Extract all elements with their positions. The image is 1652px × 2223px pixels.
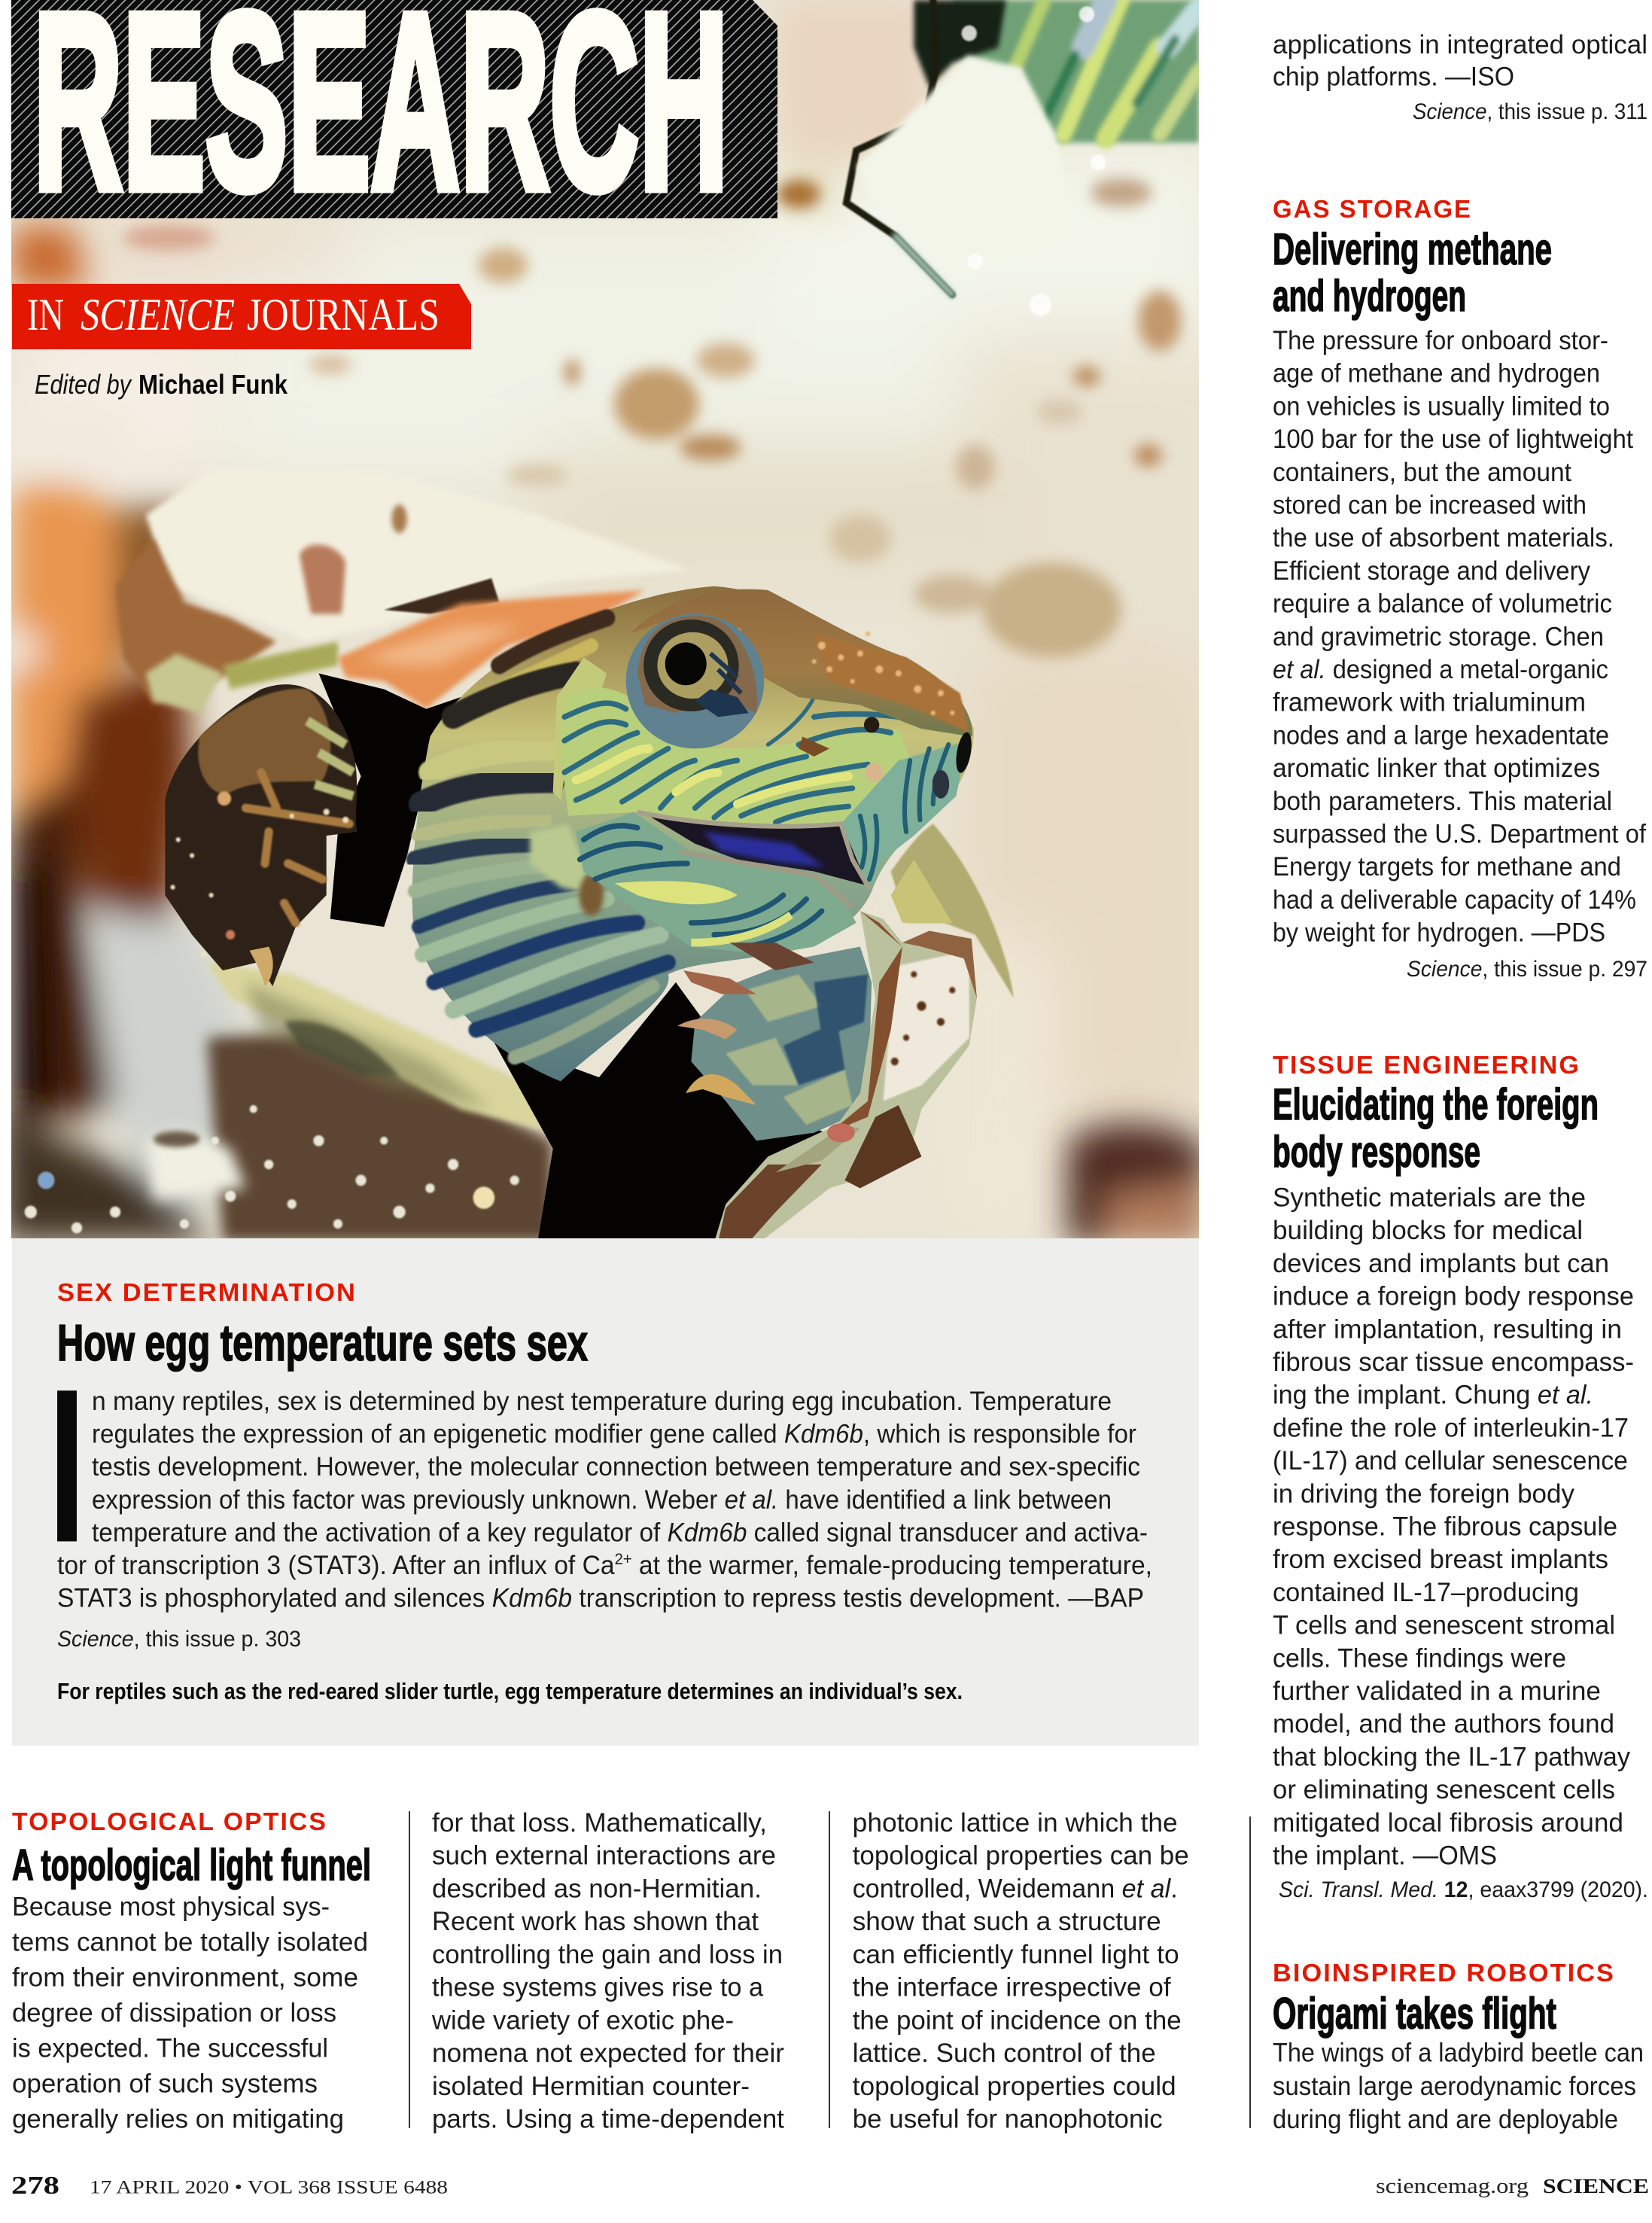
body text: fibrous scar tissue encompass-: [1273, 1348, 1634, 1377]
body text: Efficient storage and delivery: [1273, 556, 1590, 586]
body text: on vehicles is usually limited to: [1273, 391, 1610, 421]
footer right: website and journal: [1376, 2174, 1649, 2198]
blurred egg background: [21, 145, 1199, 1117]
citation: Science, this issue p. 297: [1407, 957, 1647, 982]
body text: [1273, 2039, 1644, 2134]
body text: et al. designed a metal-organic: [1273, 655, 1608, 684]
body text: at the warmer, female-producing temperature,: [632, 1551, 1152, 1580]
column 2 text: controlling the gain and loss in: [432, 1940, 783, 1969]
column 1 text: operation of such systems: [12, 2069, 318, 2099]
red tag: In Science Journals: IN: [27, 290, 64, 340]
body text: aromatic linker that optimizes: [1273, 754, 1600, 783]
column 1 text: generally relies on mitigating: [12, 2105, 344, 2133]
red tag: In Science Journals: [12, 284, 471, 349]
body text: from excised breast implants: [1273, 1545, 1608, 1574]
column 1 text: tems cannot be totally isolated: [12, 1927, 368, 1957]
column 1 text: degree of dissipation or loss: [12, 1998, 336, 2028]
headline: and hydrogen: [1273, 272, 1466, 321]
column 3 text: be useful for nanophotonic: [853, 2105, 1163, 2134]
body text: or eliminating senescent cells: [1273, 1775, 1615, 1804]
column 2 text: these systems gives rise to a: [432, 1973, 764, 2002]
body text: (IL-17) and cellular senescence: [1273, 1446, 1628, 1475]
column 3 text: the interface irrespective of: [853, 1973, 1171, 2002]
column 3 text: the point of incidence on the: [853, 2005, 1182, 2035]
column 2 text: parts. Using a time-dependent: [432, 2105, 784, 2134]
right foot with claws: [677, 942, 872, 1140]
neck dark bands: [415, 618, 668, 1058]
lower right egg rim and shell fragment: [714, 824, 1014, 1242]
turtle open mouth: [637, 812, 869, 889]
column 1 text: from their environment, some: [12, 1963, 358, 1992]
body text: The pressure for onboard stor-: [1273, 326, 1608, 355]
body text: cells. These findings were: [1273, 1643, 1566, 1673]
turtle head top with sand: [630, 589, 974, 799]
body text: after implantation, resulting in: [1273, 1314, 1622, 1344]
body text: testis development. However, the molecular connection between temperature and sex-specific: [92, 1452, 1140, 1481]
top right green turtle and crack: [846, 0, 1199, 316]
body text: both parameters. This material: [1273, 787, 1612, 816]
kicker: TOPOLOGICAL OPTICS: [12, 1807, 327, 1835]
article: gas storage: [1273, 195, 1647, 982]
body text: T cells and senescent stromal: [1273, 1611, 1615, 1640]
body text: 100 bar for the use of lightweight: [1273, 425, 1633, 454]
column 3 text: lattice. Such control of the: [853, 2039, 1156, 2068]
body text: Synthetic materials are the: [1273, 1183, 1586, 1212]
body text: devices and implants but can: [1273, 1249, 1609, 1278]
dark cavity behind turtle: [318, 673, 461, 927]
body text: model, and the authors found: [1273, 1710, 1614, 1739]
citation: Sci. Transl. Med. 12, eaax3799 (2020).: [1279, 1877, 1648, 1902]
body text: tor of transcription 3 (STAT3). After an influx of Ca: [57, 1551, 637, 1580]
column 2 text: isolated Hermitian counter-: [432, 2072, 750, 2101]
footer left: page number and issue: [11, 2172, 448, 2200]
column 3 text: topological properties could: [853, 2072, 1176, 2101]
beak with stripes: [841, 741, 968, 889]
body text: containers, but the amount: [1273, 458, 1571, 487]
body text: temperature and the activation of a key regulator of Kdm6b called signal transducer and activa-: [92, 1518, 1148, 1547]
headline: [1273, 225, 1552, 321]
column 1 text: is expected. The successful: [12, 2034, 328, 2063]
body text: that blocking the IL-17 pathway: [1273, 1742, 1630, 1771]
body text: define the role of interleukin-17: [1273, 1413, 1629, 1442]
blurred left side orange and dark: [0, 0, 1206, 1244]
body text: n many reptiles, sex is determined by nest temperature during egg incubation. Temperature: [92, 1387, 1112, 1416]
article: bioinspired robotics: [1273, 1959, 1644, 2134]
column 2 text: [431, 1808, 784, 2134]
editor credit: Michael Funk: [138, 369, 288, 400]
column 2 text: Recent work has shown that: [432, 1907, 759, 1936]
red tag: In Science Journals: SCIENCE: [81, 290, 235, 340]
left front foot: [165, 684, 357, 986]
body text: framework with trialuminum: [1273, 688, 1586, 717]
headline: body response: [1273, 1128, 1480, 1177]
photo caption: For reptiles such as the red-eared slider turtle, egg temperature determines an individual’s sex.: [57, 1678, 963, 1704]
red tag: In Science Journals: JOURNALS: [247, 290, 440, 340]
body text: in driving the foreign body: [1273, 1479, 1574, 1509]
panel: sex determination feature: [12, 1238, 1199, 1746]
editor credit: [35, 369, 288, 400]
column 3 text: [853, 1808, 1189, 2134]
body text: [1273, 1183, 1634, 1870]
footer left: page number and issue: 17 APRIL 2020 • VOL 368 ISSUE 6488: [90, 2178, 448, 2198]
body text: response. The fibrous capsule: [1273, 1512, 1617, 1542]
body text: nodes and a large hexadentate: [1273, 720, 1609, 750]
turtle eye: [626, 614, 764, 748]
column 2 text: wide variety of exotic phe-: [431, 2005, 734, 2035]
column 3 text: topological properties can be: [853, 1841, 1189, 1871]
body text: ing the implant. Chung et al.: [1273, 1381, 1593, 1410]
body text: mitigated local fibrosis around: [1273, 1808, 1623, 1838]
column 2 text: such external interactions are: [432, 1841, 776, 1871]
body text: [1273, 326, 1646, 948]
kicker: TISSUE ENGINEERING: [1273, 1051, 1581, 1079]
body text: expression of this factor was previously unknown. Weber et al. have identified a link between: [92, 1485, 1112, 1515]
body text: by weight for hydrogen. —PDS: [1273, 918, 1605, 948]
RESEARCH header banner: [11, 0, 777, 242]
turtle body and neck: [412, 586, 974, 1081]
editor credit: Edited by: [35, 369, 132, 400]
lower left green shell strip and glitter ground: [23, 961, 553, 1238]
column 3 text: controlled, Weidemann et al.: [853, 1874, 1178, 1903]
column 3 text: show that such a structure: [853, 1907, 1161, 1936]
body text: contained IL-17–producing: [1273, 1578, 1579, 1607]
body text: induce a foreign body response: [1273, 1282, 1634, 1311]
body text: STAT3 is phosphorylated and silences Kdm6b transcription to repress testis development. —BAP: [57, 1584, 1144, 1613]
body text: during flight and are deployable: [1273, 2105, 1618, 2134]
body text: the implant. —OMS: [1273, 1841, 1497, 1870]
column 2 text: for that loss. Mathematically,: [432, 1808, 767, 1838]
end of article in right column: chip platforms. —ISO: [1273, 62, 1514, 92]
photo: hatching red-eared slider turtle: [0, 0, 1229, 1244]
footer right: website and journal: SCIENCE: [1543, 2175, 1649, 2197]
black shadow below turtle: [491, 982, 844, 1242]
body text: and gravimetric storage. Chen: [1273, 622, 1604, 651]
citation: Science, this issue p. 303: [57, 1627, 301, 1652]
headline: [1273, 1080, 1599, 1177]
body text: stored can be increased with: [1273, 491, 1587, 519]
body text: Energy targets for methane and: [1273, 852, 1621, 882]
body text: the use of absorbent materials.: [1273, 523, 1614, 553]
column 2 text: nomena not expected for their: [432, 2039, 784, 2068]
blurred speckles on egg: [123, 178, 1181, 657]
body text: require a balance of volumetric: [1273, 589, 1612, 619]
turtle lower jaw: [576, 812, 856, 955]
column 3 text: photonic lattice in which the: [853, 1808, 1178, 1838]
headline: How egg temperature sets sex: [57, 1314, 588, 1372]
body text: age of methane and hydrogen: [1273, 359, 1600, 388]
drop cap: I: [48, 1343, 86, 1588]
kicker: BIOINSPIRED ROBOTICS: [1273, 1959, 1615, 1987]
article: tissue engineering: [1273, 1051, 1648, 1902]
footer right: website and journal: sciencemag.org: [1376, 2174, 1529, 2198]
body text: building blocks for medical: [1273, 1216, 1583, 1245]
kicker: GAS STORAGE: [1273, 195, 1472, 223]
body text: sustain large aerodynamic forces: [1273, 2072, 1636, 2101]
column 1 text: [12, 1893, 368, 2133]
kicker: SEX DETERMINATION: [57, 1278, 357, 1306]
top broken shell fragment: [115, 467, 691, 713]
end of article in right column: applications in integrated optical: [1273, 30, 1647, 59]
body text: 2+: [615, 1551, 632, 1568]
column 2 text: described as non-Hermitian.: [432, 1874, 762, 1903]
turtle head face stripes: [561, 687, 968, 889]
footer left: page number and issue: 278: [11, 2172, 59, 2200]
headline: A topological light funnel: [12, 1841, 371, 1890]
column 1 text: Because most physical sys-: [12, 1893, 330, 1921]
body text: further validated in a murine: [1273, 1676, 1601, 1706]
column 3 text: can efficiently funnel light to: [853, 1940, 1179, 1969]
body text: regulates the expression of an epigenetic modifier gene called Kdm6b, which is responsible for: [92, 1420, 1136, 1449]
body text: [57, 1387, 1152, 1613]
end of article in right column: [1273, 30, 1647, 124]
